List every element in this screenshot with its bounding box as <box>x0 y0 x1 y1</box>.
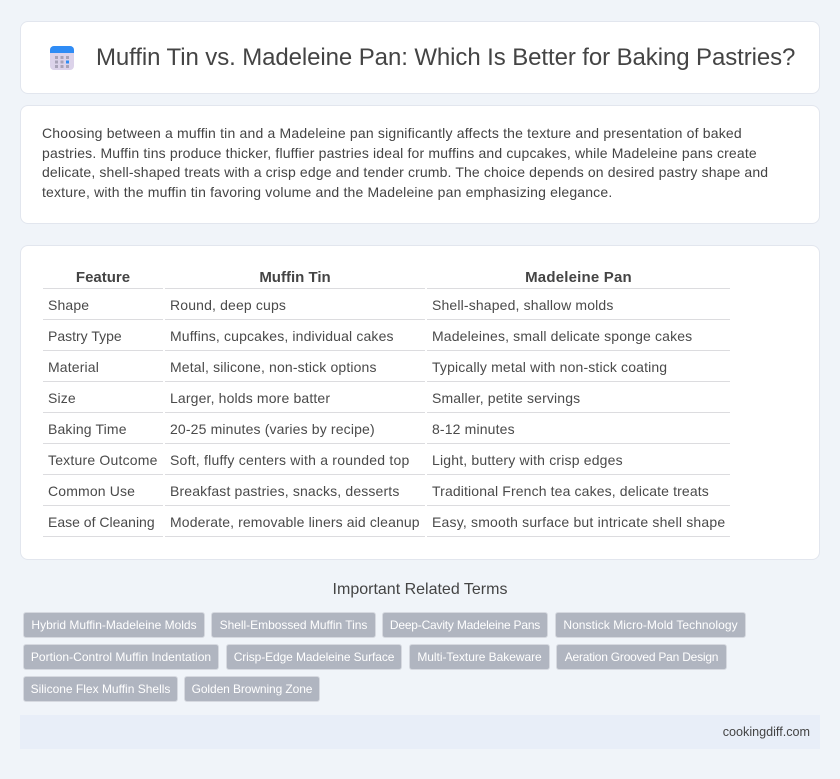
related terms tags: Crisp-Edge Madeleine Surface <box>234 650 394 664</box>
comparison table: Madeleines, small delicate sponge cakes <box>432 328 692 344</box>
related terms tags: Multi-Texture Bakeware <box>417 650 542 664</box>
comparison table: Muffins, cupcakes, individual cakes <box>170 328 394 344</box>
comparison table: 8-12 minutes <box>432 421 515 437</box>
comparison table: Ease of Cleaning <box>48 514 155 530</box>
comparison table: Round, deep cups <box>170 297 286 313</box>
title: Muffin Tin vs. Madeleine Pan: Which Is Better for Baking Pastries? <box>96 44 795 71</box>
comparison table: Pastry Type <box>48 328 122 344</box>
comparison table: Typically metal with non-stick coating <box>432 359 667 375</box>
comparison table: Common Use <box>48 483 135 499</box>
comparison table <box>43 269 730 537</box>
comparison table panel <box>20 245 820 560</box>
intro text: Choosing between a muffin tin and a Madeleine pan significantly affects the texture and presentation of baked <box>42 125 742 141</box>
related terms tags: Deep-Cavity Madeleine Pans <box>390 618 540 632</box>
comparison table: Metal, silicone, non-stick options <box>170 359 377 375</box>
comparison table: Shell-shaped, shallow molds <box>432 297 613 313</box>
comparison table: Feature <box>76 269 130 286</box>
comparison table: Larger, holds more batter <box>170 390 330 406</box>
related terms tags: Golden Browning Zone <box>192 682 312 696</box>
icon: calendar <box>50 46 74 70</box>
comparison table: Smaller, petite servings <box>432 390 580 406</box>
related terms tags: Shell-Embossed Muffin Tins <box>220 618 367 632</box>
comparison table: Texture Outcome <box>48 452 158 468</box>
footer <box>20 715 820 749</box>
related terms tags <box>23 612 746 702</box>
comparison table: Material <box>48 359 99 375</box>
related terms heading: Important Related Terms <box>333 581 507 598</box>
intro text: delicate, shell-shaped treats with a crisp edge and tender crumb. The choice depends on desired pastry shape and <box>42 164 768 180</box>
comparison table: Moderate, removable liners aid cleanup <box>170 514 420 530</box>
related terms tags: Aeration Grooved Pan Design <box>565 650 718 664</box>
comparison table: Shape <box>48 297 89 313</box>
comparison table: Easy, smooth surface but intricate shell shape <box>432 514 725 530</box>
comparison table: Size <box>48 390 76 406</box>
footer: cookingdiff.com <box>723 725 810 739</box>
comparison table: Muffin Tin <box>259 269 331 286</box>
header card <box>20 21 820 94</box>
comparison table: Traditional French tea cakes, delicate treats <box>432 483 709 499</box>
comparison table: Breakfast pastries, snacks, desserts <box>170 483 400 499</box>
related terms tags: Silicone Flex Muffin Shells <box>31 682 170 696</box>
related terms tags: Hybrid Muffin-Madeleine Molds <box>31 618 197 632</box>
comparison table: Soft, fluffy centers with a rounded top <box>170 452 409 468</box>
comparison table: Madeleine Pan <box>525 269 632 286</box>
comparison table: Baking Time <box>48 421 127 437</box>
intro text: texture, with the muffin tin favoring volume and the Madeleine pan emphasizing elegance. <box>42 184 612 200</box>
intro text: pastries. Muffin tins produce thicker, fluffier pastries ideal for muffins and cupcakes, while Madeleine pans create <box>42 145 757 161</box>
intro panel <box>20 105 820 224</box>
related terms tags: Nonstick Micro-Mold Technology <box>563 618 738 632</box>
intro text <box>42 125 768 200</box>
comparison table: 20-25 minutes (varies by recipe) <box>170 421 375 437</box>
comparison table: Light, buttery with crisp edges <box>432 452 623 468</box>
related terms tags: Portion-Control Muffin Indentation <box>31 650 211 664</box>
